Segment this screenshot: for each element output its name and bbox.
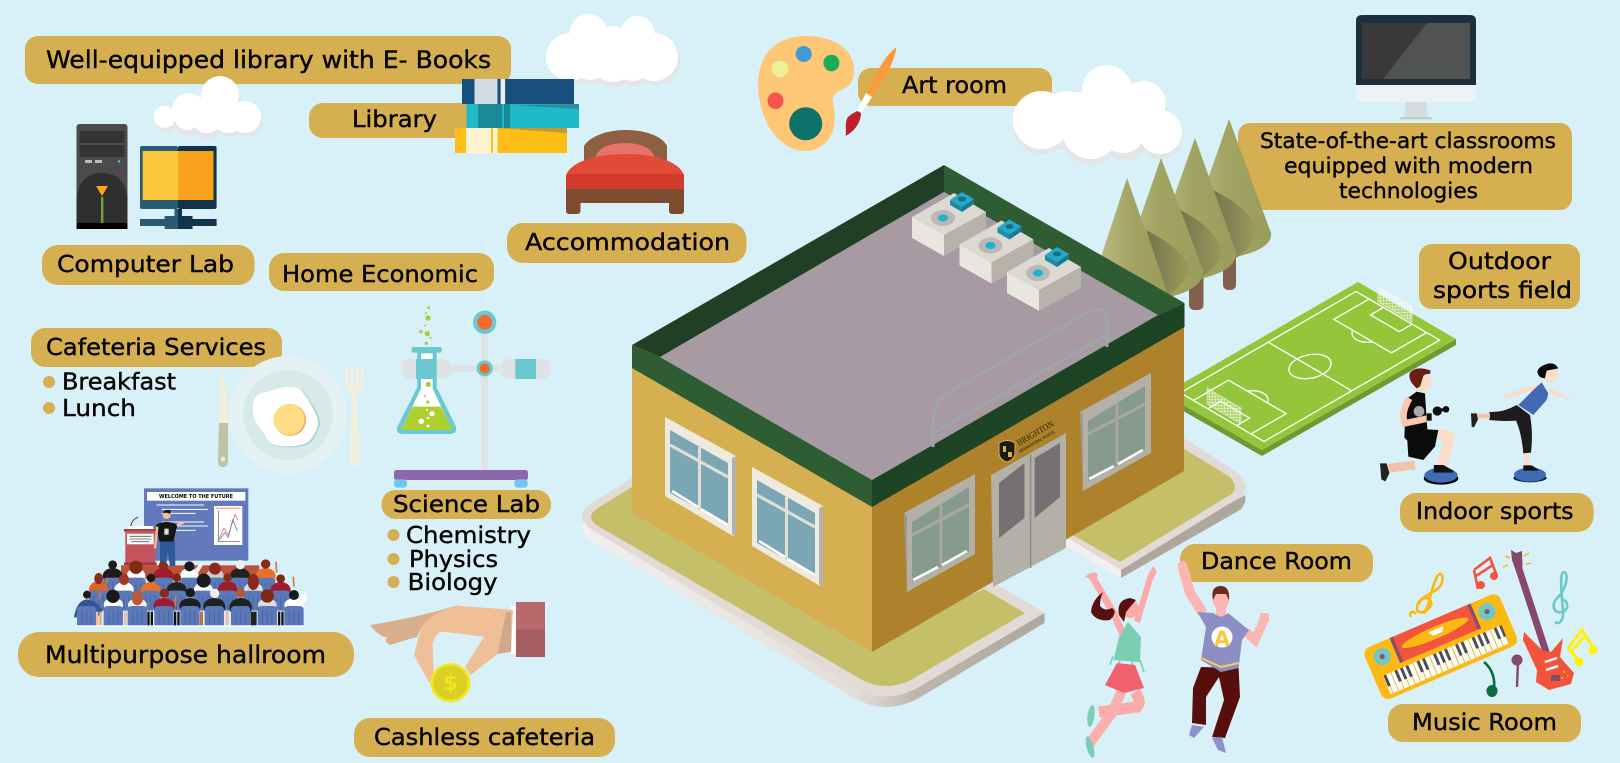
pill: Multipurpose hallroom — [18, 632, 354, 677]
roof AC units — [912, 192, 1081, 311]
pill: Library: Library — [352, 107, 437, 133]
front row — [74, 588, 304, 626]
icon: fried egg plate with cutlery — [218, 356, 364, 474]
pill: State-of-the-art classrooms — [1238, 123, 1572, 210]
pill: Indoor sports: Indoor sports — [1416, 499, 1574, 525]
icon: stack of books — [455, 79, 579, 153]
cloud above building — [1013, 65, 1183, 165]
double door — [991, 433, 1066, 587]
pill: Dance Room: Dance Room — [1201, 549, 1352, 575]
science subject list: Chemistry — [406, 523, 531, 549]
icon: dancing boy — [1178, 561, 1269, 753]
trees behind building — [1100, 119, 1271, 310]
pill: Home Economic — [269, 253, 494, 291]
plinth and lawn — [582, 438, 1246, 707]
pill: Library — [309, 103, 474, 138]
roof hand rail — [933, 309, 1107, 447]
roof — [660, 192, 1158, 480]
parapet — [632, 165, 1184, 507]
pill: State-of-the-art classrooms: equipped with modern — [1284, 154, 1533, 178]
pill: Well-equipped library with E-Books: Well-equipped library with E- Books — [46, 46, 491, 74]
cafeteria list: Breakfast — [62, 370, 176, 396]
science subject list — [388, 523, 531, 596]
science subject list: Physics — [409, 547, 498, 573]
school logo and name — [999, 418, 1057, 462]
pill: Cafeteria Services — [31, 328, 282, 367]
icon: dancing boy: A — [1214, 627, 1231, 651]
notes and clefs — [1410, 574, 1443, 617]
pill: Outdoor sports field: Outdoor — [1448, 249, 1552, 275]
pill: Accommodation: Accommodation — [525, 230, 730, 256]
icon: music instruments and notes — [1362, 550, 1598, 701]
icon: science lab flask and stand — [394, 306, 550, 488]
pill: Multipurpose hallroom: Multipurpose hallroom — [45, 641, 326, 669]
man with dumbbell — [1380, 368, 1458, 485]
pill: Indoor sports — [1400, 493, 1594, 532]
presentation screen — [144, 488, 248, 561]
right wall — [872, 303, 1184, 652]
middle row — [89, 573, 291, 611]
podium — [124, 517, 157, 565]
pill: Art room — [858, 68, 1052, 106]
icon: desktop computer — [76, 124, 217, 229]
pill: Music Room — [1388, 704, 1581, 742]
presentation screen: WELCOME TO THE FUTURE — [159, 494, 234, 500]
speaker — [155, 510, 184, 566]
pill: Well-equipped library with E-Books — [25, 36, 511, 84]
pill: Art room: Art room — [902, 73, 1007, 99]
pill: Cashless cafeteria: Cashless cafeteria — [374, 725, 595, 751]
left wall — [632, 345, 872, 652]
cafeteria list — [43, 370, 176, 422]
pill: Accommodation — [507, 223, 746, 263]
windows on left wall — [665, 417, 823, 586]
pill: Science Lab: Science Lab — [393, 492, 540, 518]
pill: Dance Room — [1180, 544, 1373, 582]
pill: Outdoor sports field: sports field — [1433, 278, 1572, 304]
icon: dancing girl — [1084, 566, 1157, 759]
pill: Cashless cafeteria — [354, 718, 615, 757]
windows on right wall — [904, 373, 1151, 592]
back row — [103, 559, 276, 598]
icon: hand holding coin: $ — [443, 671, 458, 695]
pill: Cafeteria Services: Cafeteria Services — [46, 335, 266, 361]
pill: Computer Lab — [42, 245, 254, 285]
school building on plinth — [582, 165, 1246, 707]
school logo and name: INTERNATIONAL SCHOOL — [1018, 429, 1057, 454]
science subject list: Biology — [408, 570, 498, 596]
icon: presenter and audience in hall — [74, 488, 307, 627]
school logo and name: BRIGHTON — [1015, 418, 1056, 448]
cloud top centre — [546, 14, 680, 87]
keyboard — [1362, 592, 1520, 701]
pill: Music Room: Music Room — [1412, 710, 1557, 736]
cafeteria list: Lunch — [62, 396, 136, 422]
pill: State-of-the-art classrooms: State-of-the-art classrooms — [1260, 129, 1556, 153]
icon: bed — [566, 130, 684, 214]
pill: Outdoor sports field — [1419, 244, 1580, 309]
guitar — [1503, 550, 1574, 690]
outdoor soccer field — [1164, 282, 1456, 456]
audience legs, hands and floor line — [77, 562, 307, 627]
pill: Computer Lab: Computer Lab — [57, 252, 234, 278]
pill: State-of-the-art classrooms: technologies — [1339, 179, 1478, 203]
icon: hand holding coin — [370, 602, 545, 702]
icon: classroom monitor — [1356, 15, 1476, 120]
cloud above computer — [154, 76, 262, 139]
stage — [121, 565, 259, 579]
pill: Home Economic: Home Economic — [282, 262, 478, 288]
icon: paint palette and brush — [758, 36, 896, 151]
icon: gym exercisers — [1380, 363, 1576, 485]
woman balancing — [1471, 363, 1576, 482]
